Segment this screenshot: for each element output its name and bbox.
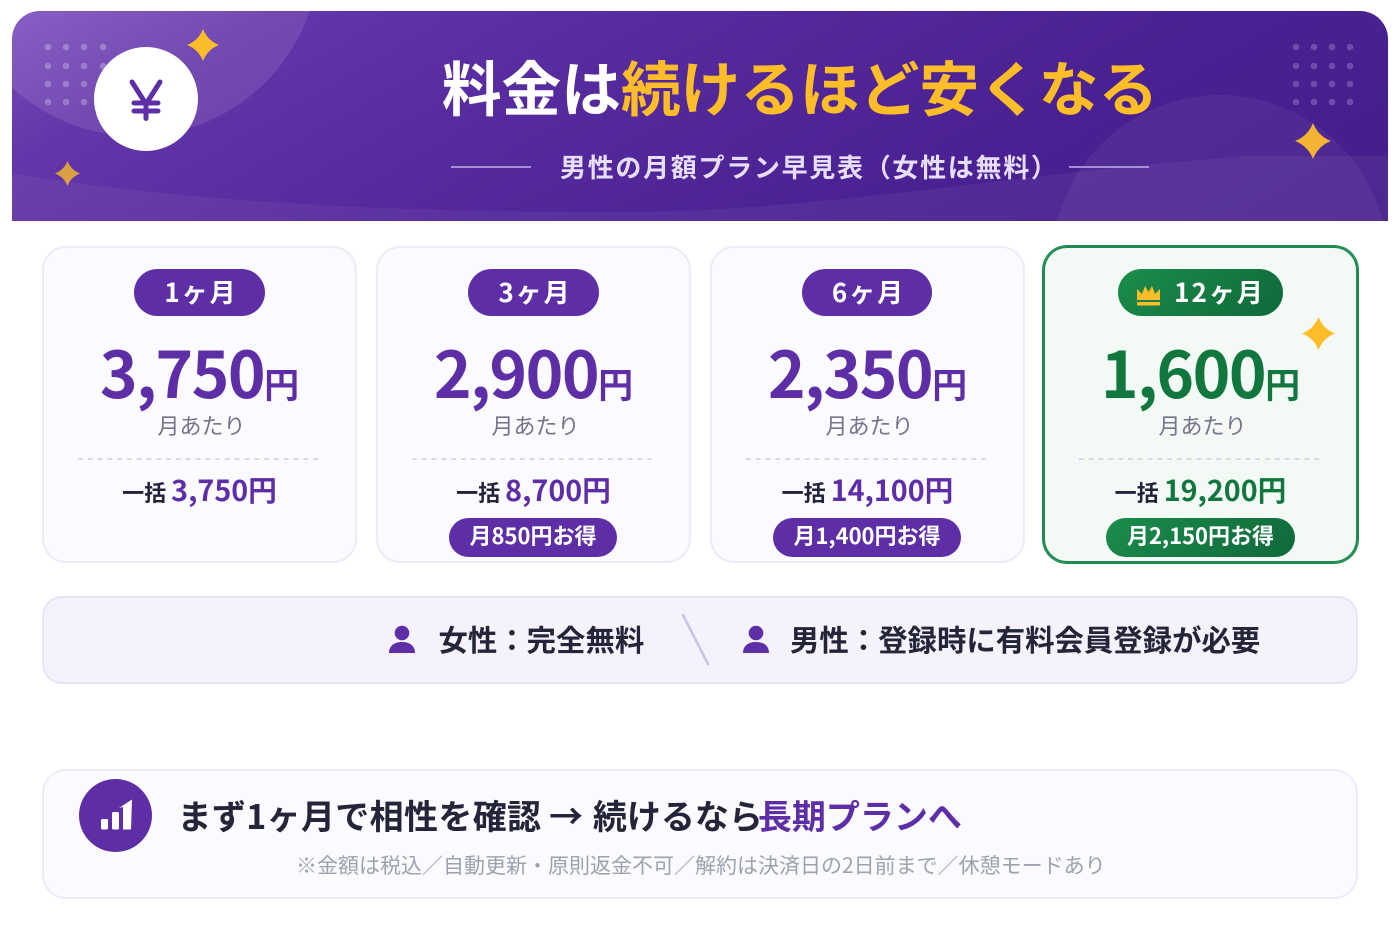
plan label bbox=[134, 269, 265, 316]
panel: eligibility note bbox=[42, 596, 1358, 684]
plan label bbox=[802, 269, 932, 316]
header banner bbox=[12, 11, 1388, 221]
plan label with crown: 12ヶ月 bbox=[1174, 273, 1265, 310]
icon: yen coin bbox=[94, 47, 198, 151]
icon: female person bbox=[389, 626, 415, 653]
lump sum: 一括 3,750円 bbox=[122, 469, 277, 510]
icon: crown bbox=[1137, 286, 1160, 306]
panel: 12 month plan (recommended) bbox=[1043, 246, 1358, 563]
icon: sparkle lower left bbox=[55, 161, 80, 186]
recommendation message: まず1ヶ月で相性を確認 → 続けるなら長期プランへ bbox=[178, 790, 962, 839]
monthly price: 1,600円 bbox=[1101, 325, 1300, 417]
plan label: 6ヶ月 bbox=[832, 273, 905, 310]
lump sum: 一括 14,100円 bbox=[782, 469, 953, 510]
savings badge bbox=[1106, 518, 1295, 557]
per month caption: 月あたり bbox=[491, 409, 580, 441]
panel: 1 month plan bbox=[42, 246, 357, 563]
savings badge: 月2,150円お得 bbox=[1127, 519, 1274, 551]
plan label bbox=[468, 269, 599, 316]
lump sum: 一括 8,700円 bbox=[456, 469, 611, 510]
title: 料金は続けるほど安くなる bbox=[442, 43, 1158, 129]
per month caption: 月あたり bbox=[825, 409, 914, 441]
savings badge bbox=[449, 518, 617, 557]
savings badge: 月850円お得 bbox=[470, 519, 596, 551]
monthly price: 2,900円 bbox=[434, 325, 633, 417]
savings badge bbox=[773, 518, 961, 557]
lump sum: 一括 19,200円 bbox=[1115, 469, 1286, 510]
icon: rising bar chart bbox=[79, 779, 152, 852]
monthly price: 3,750円 bbox=[100, 325, 299, 417]
male plan text: 男性：登録時に有料会員登録が必要 bbox=[790, 618, 1260, 660]
plan label with crown bbox=[1118, 269, 1283, 316]
savings badge: 月1,400円お得 bbox=[793, 519, 941, 551]
plan label: 1ヶ月 bbox=[164, 273, 238, 310]
plan label: 3ヶ月 bbox=[498, 273, 572, 310]
fine print: ※金額は税込／自動更新・原則返金不可／解約は決済日の2日前まで／休憩モードあり bbox=[296, 850, 1106, 880]
subtitle: 男性の月額プラン早見表（女性は無料） bbox=[560, 148, 1059, 185]
icon: sparkle right bbox=[1295, 123, 1331, 159]
icon: sparkle on best card bbox=[1302, 317, 1335, 350]
per month caption: 月あたり bbox=[1158, 409, 1246, 441]
per month caption: 月あたり bbox=[157, 409, 246, 441]
panel: 6 month plan bbox=[710, 246, 1025, 563]
female plan text: 女性：完全無料 bbox=[438, 618, 644, 660]
monthly price: 2,350円 bbox=[768, 325, 967, 417]
icon: sparkle top left bbox=[187, 29, 219, 61]
panel: recommendation bbox=[42, 769, 1358, 899]
panel: 3 month plan bbox=[376, 246, 691, 563]
icon: male person bbox=[743, 626, 769, 653]
